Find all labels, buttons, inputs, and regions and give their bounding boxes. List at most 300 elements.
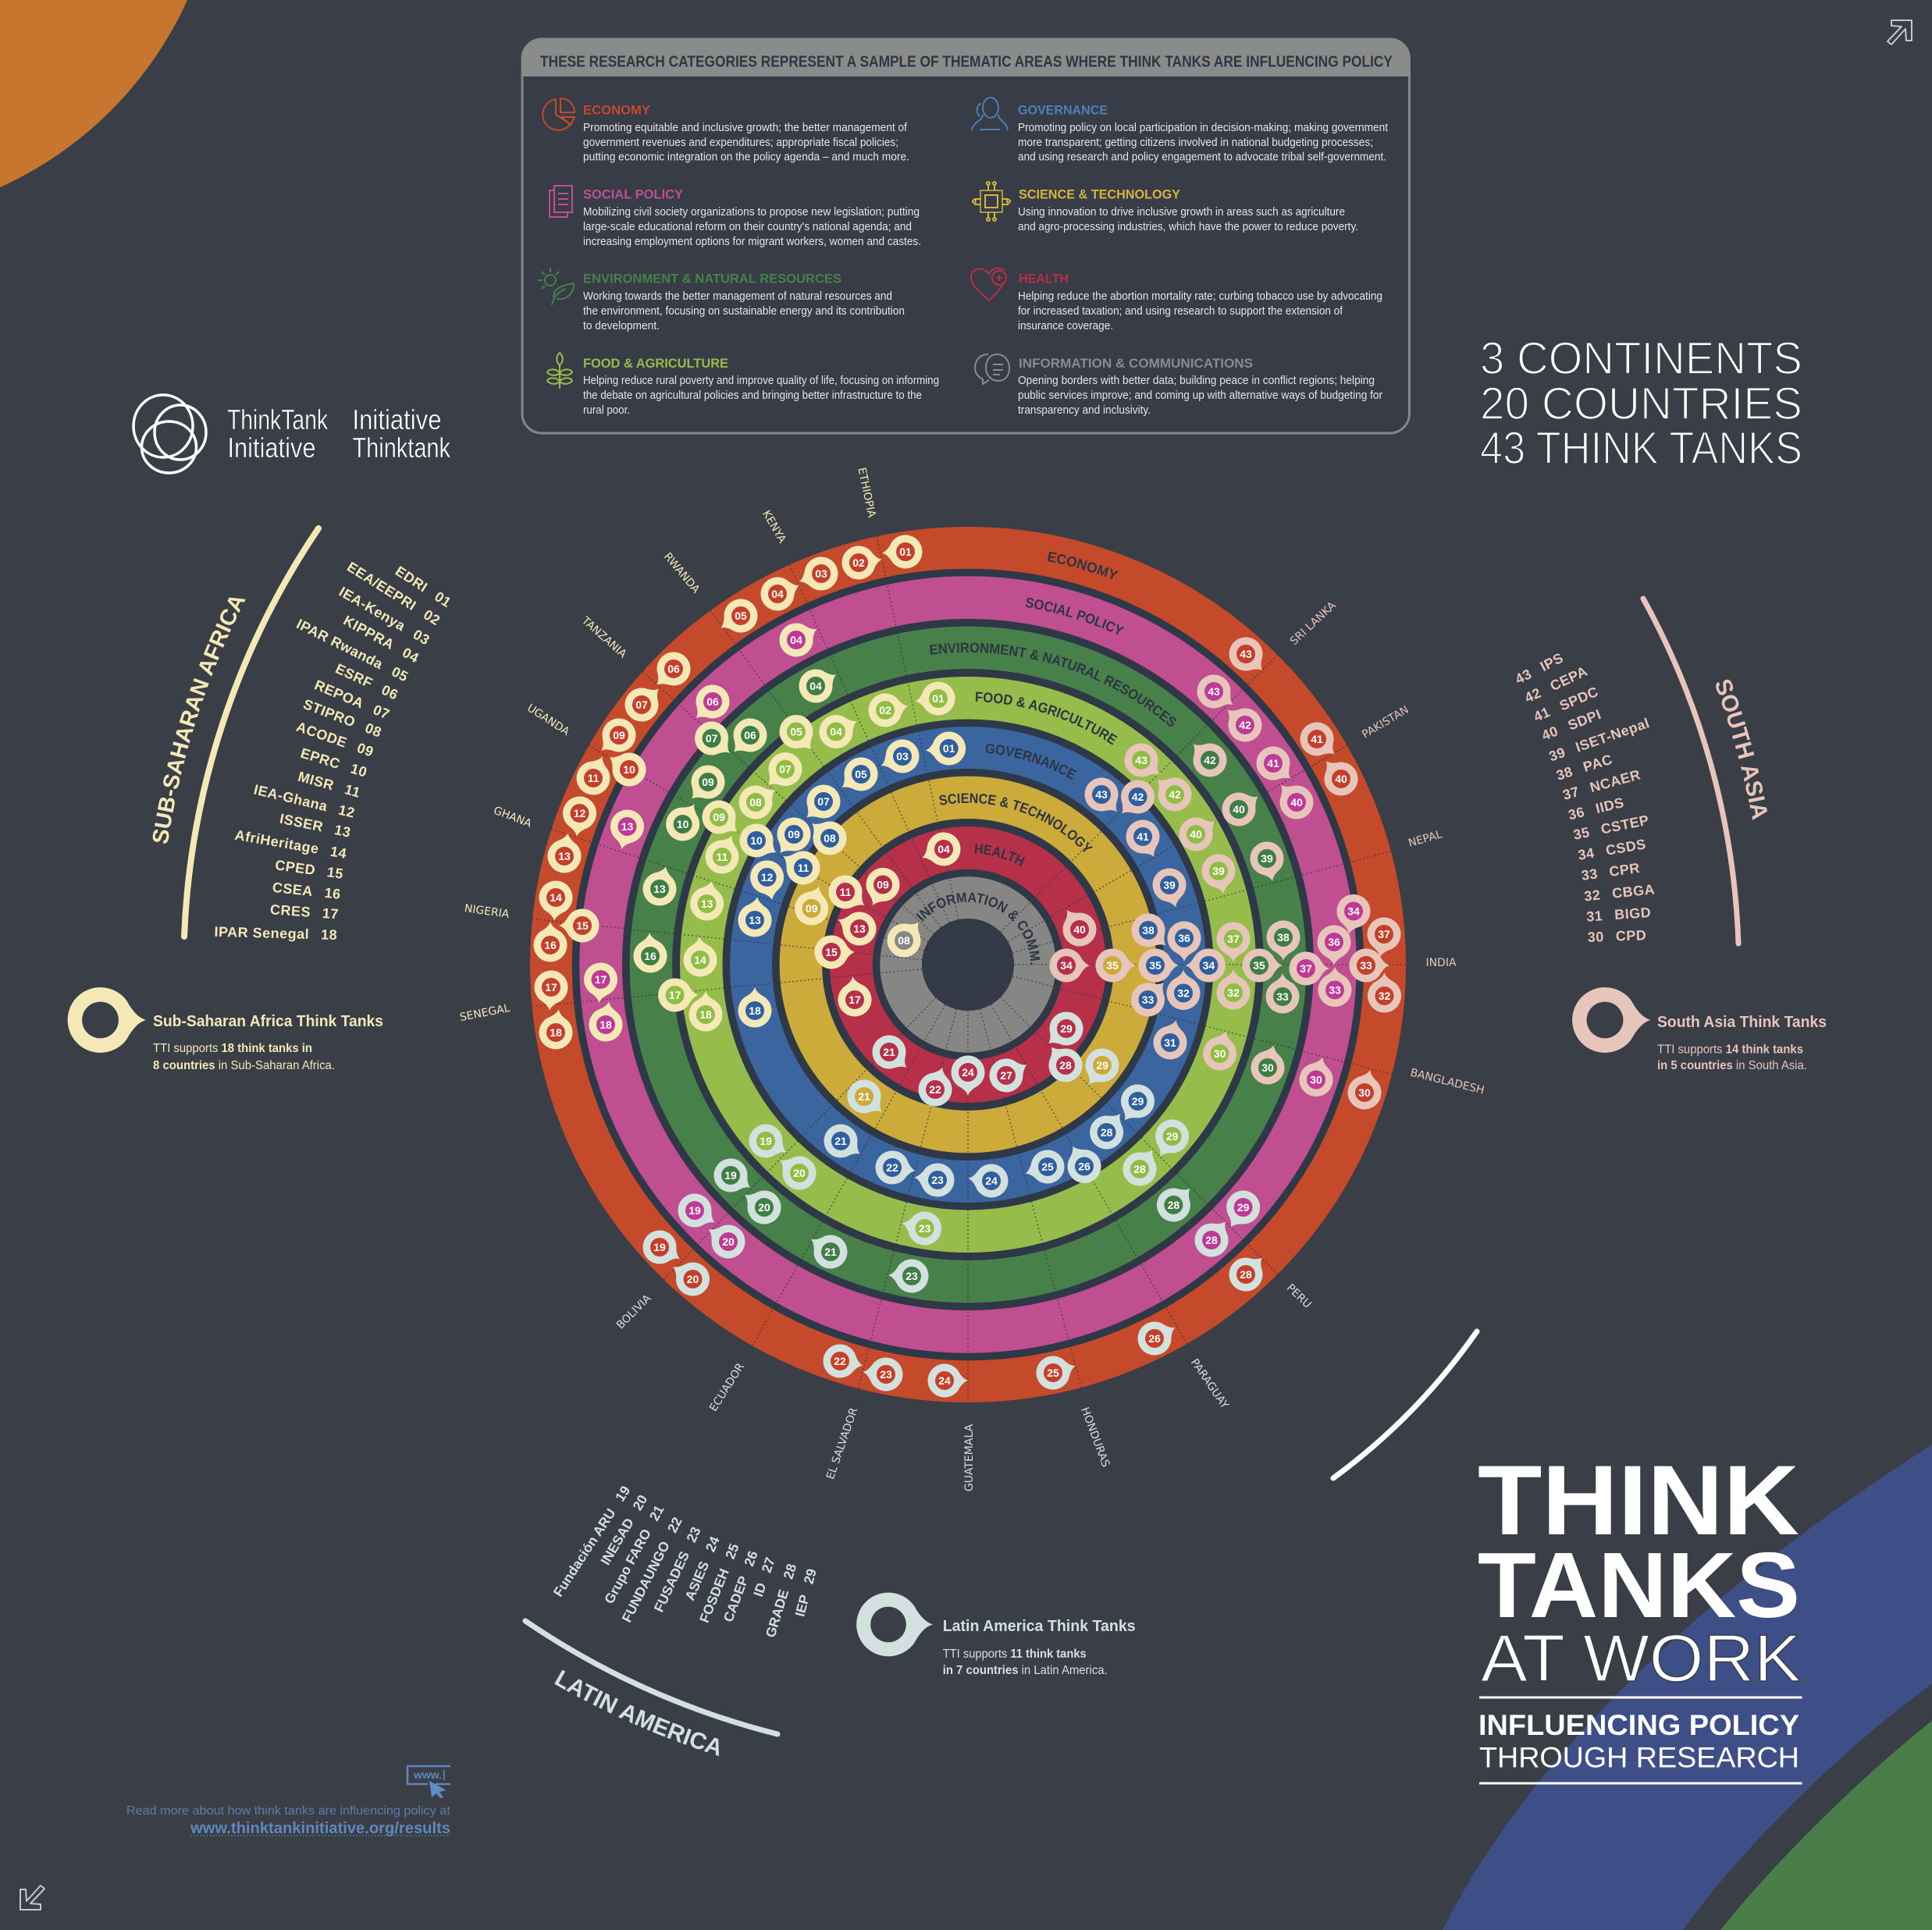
pins: health ring: 34	[1060, 959, 1073, 972]
list: South Asia think tanks: 33 CPR	[1581, 860, 1641, 883]
pins: food ring: 30	[1214, 1047, 1226, 1060]
decorative corner: green band	[1720, 1721, 1932, 1930]
category: governance: Promoting policy on local participation in decision-making; making government	[1018, 122, 1388, 134]
pins: governance ring: 22	[886, 1161, 898, 1174]
pins: food ring: 01	[932, 692, 945, 705]
list: Latin America think tanks: Grupo FARO21	[601, 1502, 667, 1606]
icon: sun and leaf	[538, 268, 574, 305]
pins: health ring: 04	[938, 843, 950, 855]
pins: environment ring: 35	[1253, 959, 1265, 972]
pins: economy ring	[532, 534, 1404, 1398]
panel heading: THESE RESEARCH CATEGORIES REPRESENT A SAMPLE OF THEMATIC AREAS WHERE THINK TANKS ARE INFLUENCING POLICY	[540, 53, 1393, 70]
pins: economy ring: 26	[1148, 1332, 1161, 1345]
country labels: Latin America: BOLIVIA	[614, 1292, 654, 1331]
pins: governance ring: 31	[1164, 1036, 1176, 1049]
country labels: Latin America	[614, 1281, 1314, 1491]
stats: continents, countries, think tanks: 43 THINK TANKS	[1480, 423, 1802, 474]
list: Sub-Saharan Africa think tanks: ESRF 06	[333, 661, 400, 703]
region heading: Sub-Saharan Africa: SUB-SAHARAN AFRICA	[153, 598, 246, 844]
icon: browser bar and cursor	[407, 1766, 450, 1798]
category: economy: Promoting equitable and inclusive growth; the better management of	[583, 122, 908, 134]
pins: economy ring: 18	[550, 1026, 562, 1039]
list: Latin America think tanks: ID27	[750, 1555, 778, 1598]
category: science and technology: SCIENCE & TECHNOLOGY	[1019, 187, 1181, 201]
region heading: Latin America: LATIN AMERICA	[554, 1670, 719, 1756]
list: Latin America think tanks: ASIES24	[681, 1534, 723, 1603]
title block: AT WORK	[1481, 1622, 1801, 1696]
pins: food ring: 40	[1190, 828, 1202, 841]
pins: food ring: 29	[1166, 1130, 1179, 1143]
title block: TANKS	[1478, 1534, 1800, 1637]
pins: food ring: 19	[760, 1135, 772, 1147]
website link: www.thinktankinitiative.org/results	[190, 1820, 450, 1837]
pins: governance ring: 11	[798, 862, 809, 874]
pins: health ring: 21	[883, 1046, 895, 1058]
pins: governance ring: 24	[985, 1175, 998, 1187]
chart hub	[922, 919, 1014, 1011]
country labels: Latin America: ECUADOR	[707, 1361, 747, 1414]
pins: economy ring: 07	[635, 698, 648, 711]
icon: documents	[550, 186, 572, 217]
country labels: South Asia: SRI LANKA	[1288, 599, 1339, 648]
pins: health ring: 15	[825, 946, 838, 958]
list: Sub-Saharan Africa think tanks: ACODE 09	[294, 719, 375, 760]
category: health: Helping reduce the abortion mortality rate; curbing tobacco use by advocating	[1018, 290, 1382, 303]
pins: governance ring: 43	[1095, 788, 1108, 801]
legend: Latin America: Latin America Think Tanks	[943, 1618, 1136, 1635]
category: health: for increased taxation; and using research to support the extension of	[1018, 305, 1343, 318]
category: science and technology: and agro-processing industries, which have the power to reduce poverty.	[1018, 221, 1358, 233]
country labels: South Asia: INDIA	[1425, 957, 1457, 969]
list: South Asia think tanks: 35 CSTEP	[1572, 812, 1650, 843]
list: Sub-Saharan Africa think tanks: EEA/EEPRI02	[344, 559, 443, 628]
pins: social policy ring: 43	[1208, 685, 1220, 698]
pins: governance ring: 23	[931, 1174, 944, 1186]
ring labels: SCIENCE & TECHNOLOGY	[939, 793, 1093, 852]
ring labels: GOVERNANCE	[985, 743, 1077, 780]
category: food and agriculture: Helping reduce rural poverty and improve quality of life, focusing on informing	[583, 375, 939, 387]
country labels: Latin America: HONDURAS	[1078, 1406, 1112, 1469]
list: Latin America think tanks: FUNDAUNGO22	[618, 1515, 685, 1625]
list: Sub-Saharan Africa think tanks: REPOA 07	[312, 677, 392, 723]
stats: continents, countries, think tanks: 3 CONTINENTS	[1480, 333, 1802, 384]
pins: information ring	[881, 912, 932, 964]
category: food and agriculture	[547, 353, 939, 417]
pins: governance ring: 10	[750, 834, 763, 847]
category: information and communications: Opening borders with better data; building peace in conflict regions; helping	[1018, 375, 1375, 387]
legend: Latin America: in 7 countries in Latin America.	[943, 1664, 1108, 1677]
country labels: South Asia: BANGLADESH	[1409, 1067, 1485, 1097]
pins: environment ring: 19	[724, 1169, 737, 1182]
country labels: Sub-Saharan Africa: RWANDA	[661, 550, 703, 596]
ring labels: HEALTH	[974, 843, 1026, 866]
legend: South Asia: TTI supports 14 think tanks	[1657, 1043, 1803, 1056]
ring: economy	[551, 548, 1385, 1381]
main chart: concentric rings	[530, 527, 1406, 1402]
category: social policy: SOCIAL POLICY	[583, 187, 684, 201]
pins: governance ring: 26	[1078, 1160, 1091, 1172]
pins: economy ring: 33	[1360, 959, 1372, 972]
pins: governance ring: 33	[1142, 993, 1154, 1006]
pins: social policy ring: 19	[688, 1204, 701, 1217]
icon: speech bubbles	[975, 354, 1009, 384]
logo mark: three circles	[133, 395, 206, 473]
legend: Sub-Saharan Africa: Sub-Saharan Africa Think Tanks	[153, 1013, 383, 1030]
category: information and communications	[975, 354, 1382, 417]
category: governance: more transparent; getting citizens involved in national budgeting processes;	[1018, 137, 1373, 149]
pins: environment ring: 07	[706, 732, 718, 745]
icon: bottom left arrow	[20, 1886, 44, 1910]
pins: food ring: 32	[1227, 986, 1240, 999]
pins: social policy ring: 33	[1329, 983, 1341, 996]
pins: social policy ring: 36	[1328, 936, 1340, 948]
legend: Sub-Saharan Africa	[68, 987, 383, 1072]
pins: social policy ring: 37	[1300, 962, 1312, 975]
pins: economy ring: 06	[667, 663, 680, 675]
list: South Asia think tanks: 40 SDPI	[1539, 706, 1603, 744]
country labels: Sub-Saharan Africa: SENEGAL	[459, 1002, 511, 1024]
pins: social policy ring: 34	[1347, 905, 1360, 918]
list: Sub-Saharan Africa think tanks: CRES 17	[269, 901, 340, 922]
pins: health ring: 29	[1060, 1022, 1073, 1035]
pins: environment ring: 38	[1277, 931, 1290, 944]
list: Sub-Saharan Africa think tanks: EDRI01	[393, 563, 454, 610]
pins: economy ring: 32	[1379, 990, 1390, 1002]
list: South Asia think tanks: 36 IIDS	[1567, 794, 1626, 823]
ring labels: INFORMATION & COMM.	[916, 893, 1040, 965]
category: health: HEALTH	[1019, 272, 1069, 286]
title block: THINK	[1478, 1445, 1799, 1555]
pins: food ring: 02	[879, 704, 891, 716]
category: social policy	[550, 186, 921, 248]
list: Sub-Saharan Africa think tanks: CSEA 16	[272, 880, 342, 902]
icon: browser bar and cursor: www.	[413, 1768, 442, 1781]
category: economy	[543, 98, 909, 163]
decorative corner: blue band	[1443, 1445, 1932, 1930]
category: environment: the environment, focusing on sustainable energy and its contribution	[583, 305, 905, 318]
pins: food ring: 37	[1227, 933, 1240, 945]
pins: environment ring: 06	[744, 729, 756, 741]
pins: governance ring: 05	[855, 768, 867, 780]
panel: research categories	[522, 39, 1410, 433]
pins: governance ring: 21	[834, 1135, 847, 1147]
pins: science and technology ring: 35	[1106, 959, 1119, 972]
pins: environment ring: 23	[906, 1270, 918, 1282]
pins: food ring: 20	[793, 1167, 806, 1179]
pins: social policy ring: 40	[1290, 796, 1303, 809]
ring: health	[851, 848, 1085, 1082]
category: information and communications: transparency and inclusivity.	[1018, 404, 1151, 417]
pins: economy ring: 30	[1358, 1086, 1371, 1099]
ring: food	[701, 698, 1235, 1232]
category: health	[971, 268, 1382, 332]
category: social policy: Mobilizing civil society organizations to propose new legislation; putting	[583, 206, 920, 219]
legend: South Asia	[1572, 987, 1827, 1072]
pins: environment ring	[632, 660, 1300, 1293]
decorative white arc	[1333, 1331, 1477, 1478]
region heading: South Asia: SOUTH ASIA	[1716, 679, 1767, 820]
region arc: Latin America	[525, 1621, 777, 1734]
pins: governance ring: 09	[788, 828, 800, 841]
pins: environment ring: 28	[1168, 1199, 1179, 1211]
pins: economy ring: 17	[545, 981, 557, 993]
list: Sub-Saharan Africa think tanks	[214, 559, 454, 943]
pins: food ring: 05	[790, 726, 802, 738]
category: governance: GOVERNANCE	[1018, 102, 1108, 117]
pins: health ring: 40	[1073, 923, 1086, 936]
pins: social policy ring: 17	[595, 973, 607, 986]
list: South Asia think tanks: 32 CBGA	[1583, 881, 1656, 905]
country labels: South Asia: NEPAL	[1407, 828, 1444, 850]
stats: continents, countries, think tanks: 20 COUNTRIES	[1480, 379, 1802, 429]
pins: governance ring: 42	[1132, 791, 1144, 803]
list: Latin America think tanks: IEP29	[792, 1567, 820, 1619]
pins: governance ring: 32	[1177, 986, 1190, 999]
title block	[1478, 1445, 1802, 1784]
list: South Asia think tanks: 43IPS	[1513, 650, 1566, 688]
pins: economy ring: 25	[1047, 1367, 1059, 1379]
list: South Asia think tanks	[1513, 650, 1656, 945]
pins: governance ring: 13	[749, 914, 761, 926]
ring labels: ENVIRONMENT & NATURAL RESOURCES	[929, 643, 1176, 727]
pins: health ring: 09	[877, 879, 889, 891]
list: Latin America think tanks: GRADE28	[763, 1562, 799, 1640]
pins: food ring: 43	[1135, 754, 1147, 766]
category: health: insurance coverage.	[1018, 320, 1113, 332]
list: Sub-Saharan Africa think tanks: AfriHeritage 14	[233, 827, 348, 862]
list: Latin America think tanks	[550, 1483, 820, 1640]
list: Sub-Saharan Africa think tanks: IEA-Ghana 12	[252, 781, 357, 821]
pins: governance ring: 18	[749, 1004, 761, 1017]
pins: food ring: 08	[749, 796, 762, 809]
pins: health ring: 13	[853, 922, 866, 935]
category: governance	[972, 98, 1388, 163]
country labels: Sub-Saharan Africa	[459, 467, 878, 1024]
pins: governance ring: 28	[1101, 1126, 1113, 1139]
category: economy: government revenues and expenditures; appropriate fiscal policies;	[583, 137, 898, 149]
legend: Sub-Saharan Africa: TTI supports 18 think tanks in	[153, 1042, 312, 1055]
pins: social policy ring: 04	[790, 634, 802, 646]
region arc: Sub-Saharan Africa	[184, 528, 318, 937]
ring labels: FOOD & AGRICULTURE	[976, 691, 1118, 745]
list: South Asia think tanks: 30 CPD	[1587, 927, 1647, 945]
pins: economy ring: 40	[1335, 773, 1347, 785]
legend: Latin America	[856, 1593, 1136, 1677]
pins: social policy ring: 30	[1310, 1074, 1322, 1086]
legend: Latin America: TTI supports 11 think tanks	[943, 1647, 1087, 1661]
category: environment: to development.	[583, 320, 660, 332]
category: information and communications: public services improve; and coming up with alternative ways of budgeting for	[1018, 389, 1382, 402]
list: Sub-Saharan Africa think tanks: IPAR Rwanda05	[294, 616, 411, 685]
country labels: Sub-Saharan Africa: GHANA	[492, 805, 533, 830]
category: science and technology	[973, 182, 1358, 233]
list: South Asia think tanks: 37 NCAER	[1561, 766, 1642, 803]
pins: social policy ring: 20	[722, 1235, 735, 1248]
list: Sub-Saharan Africa think tanks: ISSER 13	[279, 811, 352, 841]
list: South Asia think tanks: 38 PAC	[1554, 752, 1614, 784]
pins: health ring: 28	[1059, 1059, 1072, 1072]
pins: food ring: 13	[701, 897, 713, 910]
pins: social policy ring: 42	[1239, 719, 1251, 731]
logo wordmark: Initiative	[228, 432, 315, 464]
pins: economy ring: 16	[544, 939, 557, 951]
icon: chip	[973, 182, 1010, 221]
pins: economy ring: 03	[815, 567, 827, 580]
list: Latin America think tanks: FOSDEH25	[696, 1541, 742, 1625]
panel header band	[522, 39, 1410, 76]
pins: social policy ring	[582, 614, 1373, 1265]
pins: economy ring: 20	[687, 1273, 699, 1285]
pins: governance ring: 08	[824, 832, 836, 844]
country labels: Latin America: PARAGUAY	[1188, 1356, 1231, 1412]
pins: food ring	[658, 680, 1251, 1249]
icon: pie chart	[543, 98, 575, 130]
list: Latin America think tanks: FUSADES23	[651, 1524, 704, 1615]
pins: food ring: 07	[779, 763, 792, 776]
pins: food ring: 18	[699, 1008, 712, 1021]
country labels: South Asia	[1288, 599, 1485, 1097]
logo wordmark	[227, 403, 451, 464]
pins: economy ring: 23	[880, 1368, 892, 1381]
pins: governance ring: 35	[1149, 959, 1162, 972]
ring: governance	[751, 748, 1185, 1182]
pins: economy ring: 37	[1378, 928, 1390, 940]
pins: social policy ring: 06	[706, 695, 719, 708]
pins: food ring: 28	[1133, 1163, 1146, 1175]
country labels: Sub-Saharan Africa: ETHIOPIA	[855, 467, 878, 519]
pins: governance ring: 07	[817, 795, 830, 808]
list: Latin America think tanks: INESAD20	[597, 1492, 651, 1568]
logo wordmark: Initiative	[353, 403, 442, 435]
pins: food ring: 04	[830, 726, 842, 738]
pins: economy ring: 43	[1240, 648, 1252, 660]
category: environment	[538, 268, 905, 332]
pins: food ring: 09	[713, 811, 725, 823]
pins: economy ring: 15	[576, 919, 589, 932]
title block: INFLUENCING POLICY	[1478, 1709, 1799, 1741]
list: South Asia think tanks: 42 CEPA	[1522, 663, 1590, 706]
category: food and agriculture: the debate on agricultural policies and bringing better infrastructure to the	[583, 389, 922, 402]
category: economy: putting economic integration on the policy agenda – and much more.	[583, 151, 909, 163]
logo	[133, 395, 451, 473]
icon: pink pin	[1572, 987, 1650, 1053]
logo wordmark: ThinkTank	[227, 403, 329, 435]
legend: South Asia: in 5 countries in South Asia.	[1657, 1059, 1807, 1072]
pins: environment ring: 33	[1276, 990, 1289, 1003]
icon: people	[972, 98, 1008, 130]
country labels: South Asia: PAKISTAN	[1360, 704, 1411, 741]
ring: information	[901, 897, 1035, 1032]
country labels: Sub-Saharan Africa: NIGERIA	[464, 902, 511, 921]
pins: social policy ring: 29	[1237, 1201, 1250, 1214]
pins: health ring: 17	[849, 993, 861, 1006]
category: social policy: large-scale educational reform on their country's national agenda; and	[583, 221, 912, 233]
pins: health ring: 11	[840, 886, 852, 898]
pins: governance ring: 39	[1163, 879, 1176, 891]
pins: environment ring: 40	[1233, 803, 1245, 816]
category: environment: ENVIRONMENT & NATURAL RESOURCES	[583, 272, 841, 286]
pins: environment ring: 10	[677, 818, 689, 830]
pins: economy ring: 12	[574, 807, 585, 819]
pins: health ring: 24	[962, 1066, 974, 1079]
category: environment: Working towards the better management of natural resources and	[583, 290, 892, 303]
pins: science and technology ring: 09	[806, 902, 818, 915]
pins: environment ring: 21	[824, 1246, 837, 1258]
pins: science and technology ring: 21	[858, 1090, 870, 1103]
pins: economy ring: 19	[653, 1241, 666, 1253]
pins: governance ring: 29	[1132, 1095, 1144, 1107]
list: South Asia think tanks: 41 SPDC	[1532, 684, 1601, 725]
list: Sub-Saharan Africa think tanks: STIPRO 08	[301, 696, 384, 741]
pins: food ring: 23	[919, 1222, 931, 1235]
pins: environment ring: 13	[653, 883, 666, 895]
list: Sub-Saharan Africa think tanks: IPAR Senegal 18	[214, 924, 337, 943]
pins: governance ring: 38	[1142, 924, 1155, 937]
pins: health ring: 27	[1000, 1069, 1012, 1082]
website link: Read more about how think tanks are influencing policy at	[126, 1804, 450, 1818]
country labels: Sub-Saharan Africa: UGANDA	[525, 702, 572, 738]
pins: environment ring: 20	[758, 1201, 770, 1214]
list: Sub-Saharan Africa think tanks: EPRC 10	[299, 745, 369, 780]
category: economy: ECONOMY	[583, 102, 651, 117]
list: Latin America think tanks: CADEP26	[720, 1548, 761, 1624]
country labels: Sub-Saharan Africa: TANZANIA	[578, 614, 629, 661]
pins: governance ring	[733, 730, 1226, 1200]
website link	[126, 1766, 450, 1837]
pins: science and technology ring: 29	[1096, 1059, 1108, 1072]
pins: governance ring: 41	[1137, 830, 1149, 843]
ring labels: SOCIAL POLICY	[1026, 598, 1124, 635]
ring: science and technology	[801, 798, 1135, 1132]
pins: economy ring: 28	[1240, 1268, 1252, 1281]
category: governance: and using research and policy engagement to advocate tribal self-government.	[1018, 151, 1386, 163]
list: South Asia think tanks: 34 CSDS	[1577, 836, 1647, 863]
region arc: South Asia	[1643, 599, 1738, 944]
country labels: Latin America: PERU	[1284, 1281, 1314, 1311]
pins: social policy ring: 13	[621, 820, 633, 833]
pins: economy ring: 04	[771, 588, 784, 600]
pins: social policy ring: 28	[1205, 1234, 1218, 1246]
icon: plant	[547, 353, 572, 389]
logo wordmark: Thinktank	[353, 432, 451, 464]
pins: economy ring: 10	[623, 763, 635, 776]
pins: governance ring: 12	[761, 871, 774, 883]
pins: environment ring: 09	[702, 776, 714, 788]
list: South Asia think tanks: 31 BIGD	[1586, 905, 1652, 925]
list: Sub-Saharan Africa think tanks: KIPPRA04	[341, 613, 422, 666]
pins: economy ring: 02	[852, 556, 865, 569]
country labels: Sub-Saharan Africa: KENYA	[760, 508, 788, 546]
category: food and agriculture: rural poor.	[583, 404, 630, 417]
category: social policy: increasing employment options for migrant workers, women and castes.	[583, 236, 921, 248]
pins: economy ring: 24	[938, 1374, 951, 1387]
pins: food ring: 11	[717, 851, 728, 863]
pins: governance ring: 34	[1203, 959, 1215, 972]
legend: Sub-Saharan Africa: 8 countries in Sub-Saharan Africa.	[153, 1059, 335, 1072]
pins: food ring: 39	[1212, 865, 1225, 877]
pins: social policy ring: 18	[600, 1018, 612, 1031]
pins: food ring: 42	[1169, 788, 1181, 801]
pins: economy ring: 11	[588, 772, 600, 784]
pins: environment ring: 30	[1261, 1061, 1274, 1074]
icon: top right arrow	[1888, 20, 1912, 44]
pins: health ring: 22	[929, 1083, 941, 1096]
list: South Asia think tanks: 39 ISET-Nepal	[1547, 715, 1652, 764]
pins: health ring	[815, 827, 1103, 1111]
title block: THROUGH RESEARCH	[1479, 1741, 1799, 1773]
ring: environment	[651, 648, 1285, 1281]
category: science and technology: Using innovation to drive inclusive growth in areas such as agriculture	[1018, 206, 1345, 219]
